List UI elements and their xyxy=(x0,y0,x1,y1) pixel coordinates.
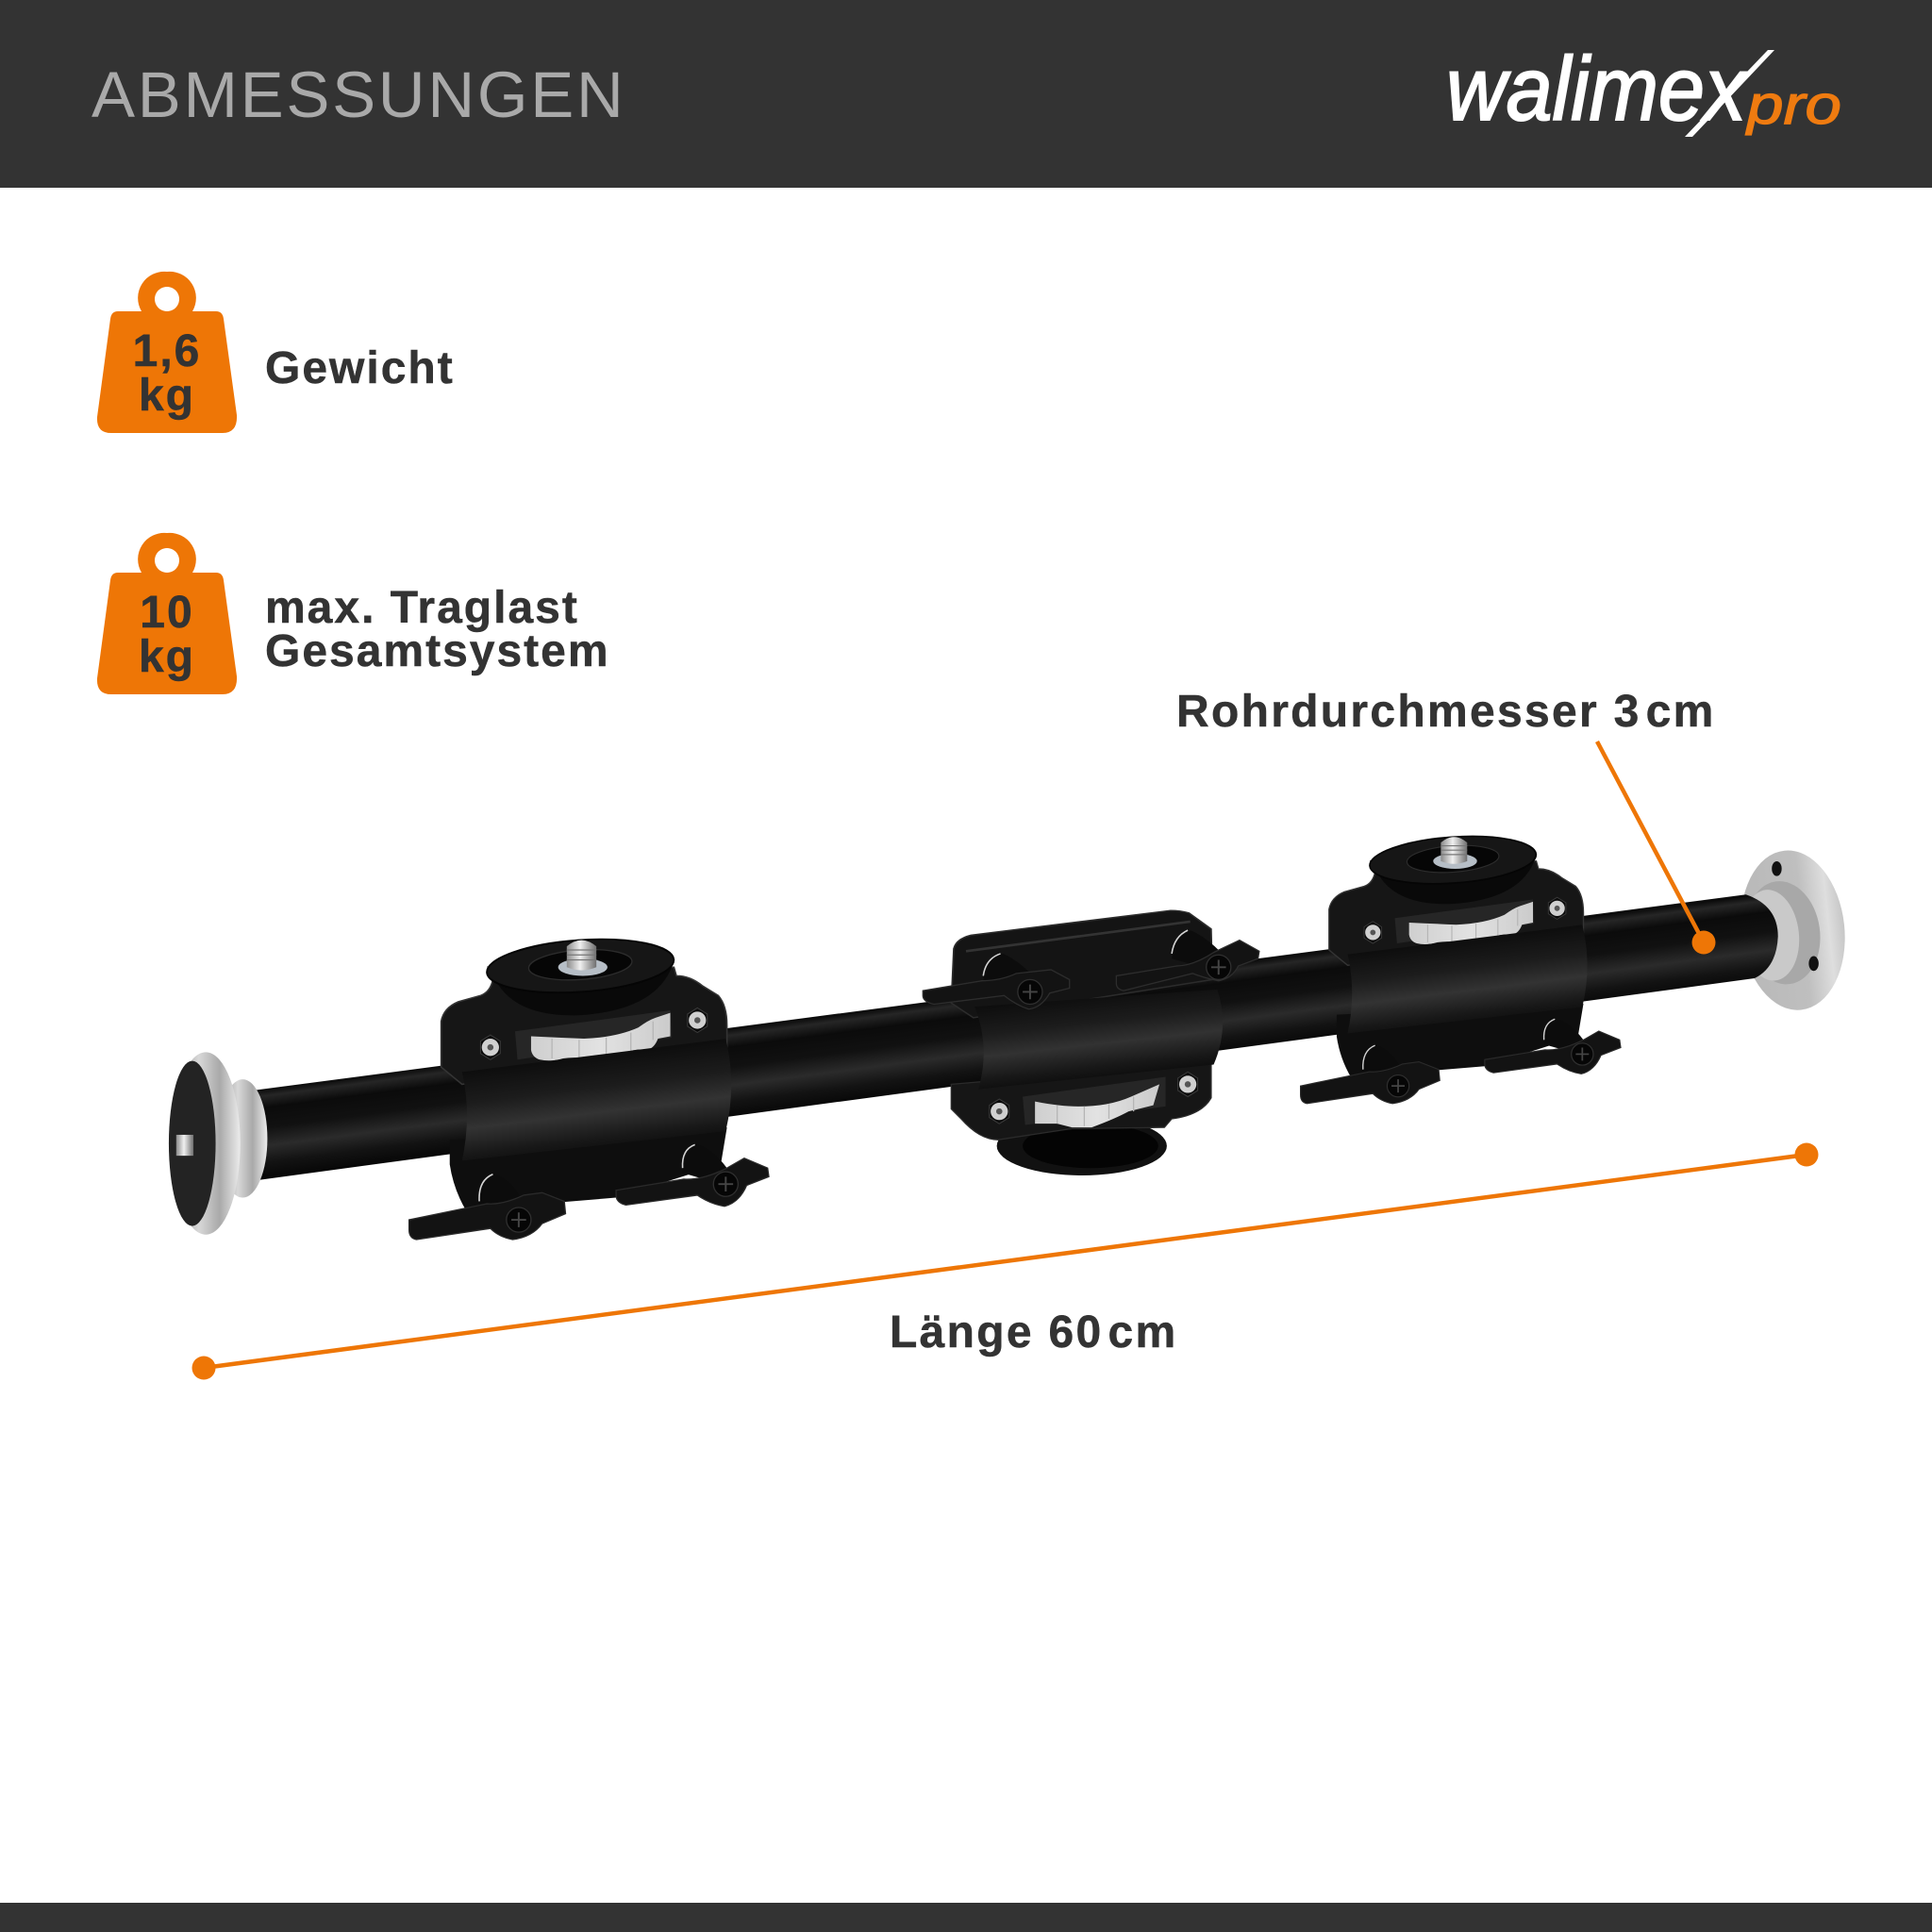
icon: weight 10 kg xyxy=(97,533,237,694)
clamp sleeve xyxy=(462,1039,731,1160)
label: max. Traglast Gesamtsystem: Gesamtsystem xyxy=(265,626,610,676)
weight stat: Gewicht xyxy=(97,272,455,433)
label: max. Traglast Gesamtsystem: max. Traglast xyxy=(265,583,579,633)
title: ABMESSUNGEN xyxy=(92,58,625,131)
clamp wing nuts xyxy=(409,1144,769,1240)
left clamp xyxy=(409,934,769,1240)
logo slash xyxy=(1685,50,1774,137)
clamp platform xyxy=(485,934,675,1015)
logo pro: pro xyxy=(1745,75,1841,136)
icon: weight 10 kg: 10 xyxy=(140,588,194,638)
left end flange xyxy=(169,1052,267,1235)
icon: weight 1,6 kg: kg xyxy=(139,371,195,421)
centre clamp rear plate xyxy=(951,910,1212,1018)
centre clamp screws xyxy=(990,1072,1198,1124)
centre clamp xyxy=(923,910,1259,1175)
icon: weight 1,6 kg xyxy=(97,272,237,433)
dimension line: length xyxy=(192,1143,1819,1379)
clamp locking wheel xyxy=(515,1010,672,1062)
label: Gewicht: Gewicht xyxy=(265,343,455,393)
footer bar xyxy=(0,1903,1932,1932)
centre clamp lower housing xyxy=(951,1062,1211,1140)
weight stat: max. Traglast xyxy=(97,533,610,694)
centre clamp wing nuts xyxy=(923,930,1259,1009)
header bar xyxy=(0,0,1932,188)
centre clamp sleeve xyxy=(974,990,1223,1090)
icon: weight 1,6 kg: 1,6 xyxy=(133,326,201,376)
label: tube diameter: Rohrdurchmesser 3cm xyxy=(1176,687,1716,737)
right end flange xyxy=(1733,845,1853,1015)
logo: walimex pro: walimex xyxy=(1446,39,1749,140)
leader line: tube diameter xyxy=(1597,741,1715,955)
label: length: Länge 60cm xyxy=(890,1307,1177,1357)
icon: weight 10 kg: kg xyxy=(139,632,195,682)
clamp housing xyxy=(441,967,727,1084)
centre clamp locking wheel xyxy=(1023,1077,1166,1127)
tube xyxy=(234,894,1778,1182)
right clamp xyxy=(1301,831,1621,1104)
product photo: mounting bar xyxy=(169,831,1853,1240)
centre clamp foot xyxy=(997,1116,1167,1175)
clamp screws xyxy=(480,1008,708,1059)
